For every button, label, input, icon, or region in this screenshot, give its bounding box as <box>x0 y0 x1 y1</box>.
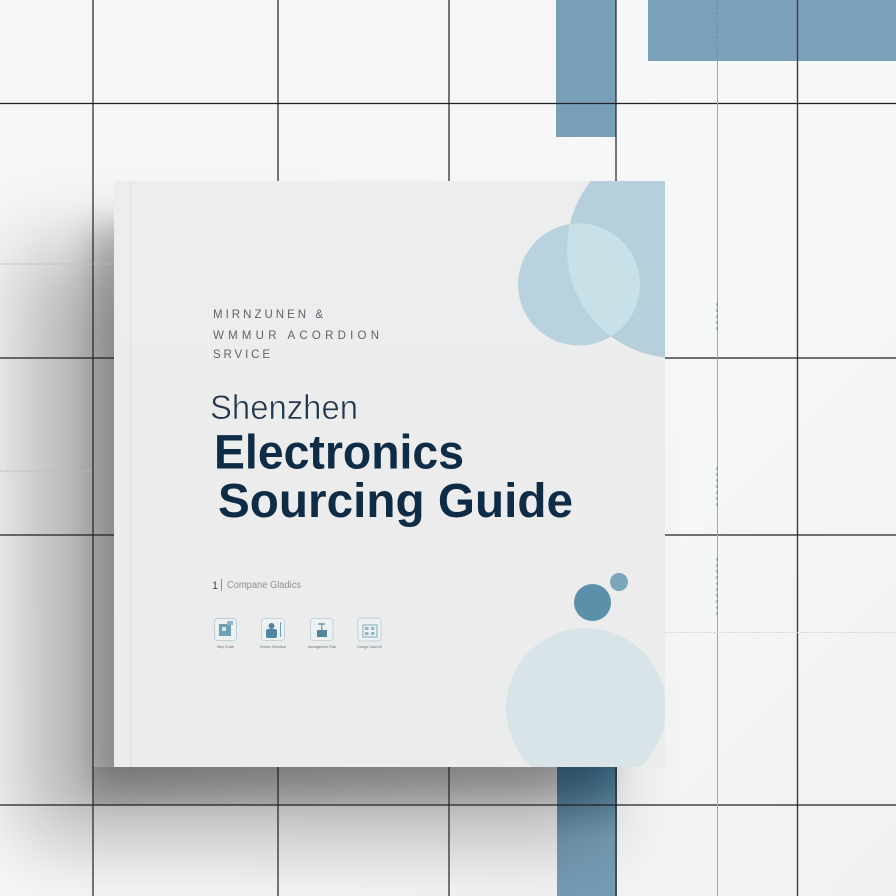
spine crease <box>130 181 132 767</box>
decorative circles bottom right <box>506 573 665 767</box>
title: Shenzhen: Shenzhen <box>210 389 358 427</box>
blue block: top centre bar <box>556 0 616 137</box>
section label: Compane Gladics <box>227 580 301 591</box>
section label <box>212 579 301 592</box>
icon: company 2 <box>260 618 286 649</box>
small header text: SRVICE <box>213 349 270 361</box>
title: Electronics: Electronics <box>214 426 464 480</box>
small header text: WMMUR ACORDION <box>213 330 379 342</box>
small header text: MIRNZUNEN & <box>213 309 323 321</box>
icon: company 3 <box>308 618 336 649</box>
title: Sourcing Guide: Sourcing Guide <box>218 475 573 528</box>
blue block: top right band <box>648 0 896 61</box>
blue block: bottom bar <box>557 767 617 896</box>
book drop shadow <box>25 225 602 840</box>
decorative circles top right <box>518 181 665 358</box>
section label: 1 <box>212 580 218 592</box>
icon: company 3: Management Risk <box>308 645 336 649</box>
icon: company 1 <box>214 618 236 649</box>
small header text <box>213 309 379 361</box>
icon: company 4: Design Data Kit <box>357 645 382 649</box>
icon: company 1: Step Guide <box>217 645 234 649</box>
icon: company 4 <box>357 618 382 649</box>
blue bar shadowed top <box>557 767 617 837</box>
panel: book cover <box>114 181 665 767</box>
icon: company 2: Vendor Selection <box>260 645 286 649</box>
